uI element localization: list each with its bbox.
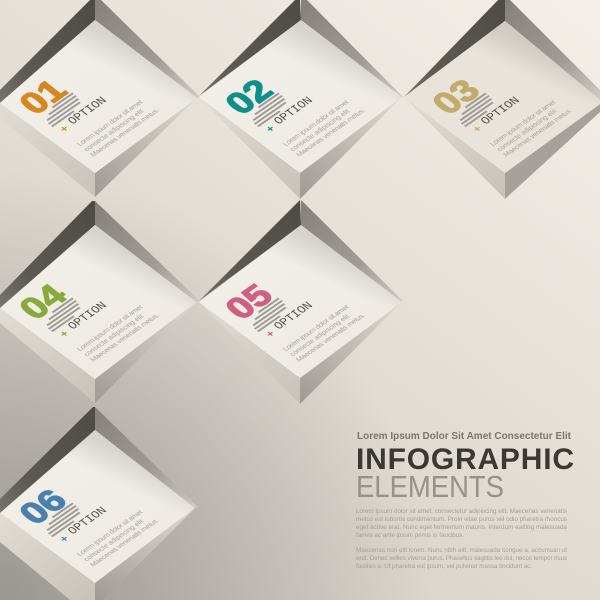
description: consecte adipiscing elit <box>289 314 352 358</box>
description <box>76 507 161 568</box>
lines icon <box>39 503 85 536</box>
number 05: 05 <box>217 278 281 326</box>
option label: OPTION <box>271 95 316 127</box>
description: Lorem ipsum dolor sit amet <box>282 99 351 148</box>
title block <box>356 430 574 570</box>
plus: + <box>470 124 485 135</box>
option label: OPTION <box>65 95 110 127</box>
paragraph 1: metus est lobortis condimentum. Proin vitae purus vel odio pharetra rhoncus <box>356 516 567 523</box>
description: consecte adipiscing elit <box>289 109 352 153</box>
paragraph 1: eget active erat. Nunc eget fermentum mauris. Interdum eatting malesuada <box>356 524 567 531</box>
paragraph 1 <box>356 508 567 539</box>
description <box>282 302 367 363</box>
title: infographic: INFOGRAPHIC <box>356 443 574 476</box>
plus: + <box>263 329 278 340</box>
subtitle: Lorem Ipsum Dolor Sit Amet Consectetur Elit <box>357 430 571 442</box>
title: elements: ELEMENTS <box>356 469 504 504</box>
paragraph 2: Maecenas non elit lorem. Nunc nibh elit, malesuada congue a, accumsan ut <box>356 547 567 554</box>
panel: option 02 <box>199 0 403 199</box>
description: consecte adipiscing elit <box>83 109 146 153</box>
plus: + <box>263 124 278 135</box>
description: Lorem ipsum dolor sit amet <box>489 99 558 148</box>
paragraph 2: facilisis a. Ut pharetra est ipsum, vel pulvinar massa tincidunt ac. <box>356 563 532 570</box>
description: consecte adipiscing elit <box>496 109 559 153</box>
description: Lorem ipsum dolor sit amet <box>76 99 145 148</box>
plus: + <box>57 534 72 545</box>
panel: option 06 <box>0 407 198 600</box>
panel: option 04 <box>0 201 200 403</box>
number 06: 06 <box>11 483 75 531</box>
number 04: 04 <box>11 278 76 326</box>
option label: OPTION <box>65 505 110 537</box>
number 03: 03 <box>424 73 488 121</box>
description <box>489 97 574 158</box>
description: consecte adipiscing elit <box>83 519 146 563</box>
description: Lorem ipsum dolor sit amet <box>76 509 145 558</box>
description: Maecenas venenatis metus. <box>89 108 161 158</box>
description: Lorem ipsum dolor sit amet <box>76 304 145 353</box>
plus: + <box>57 124 72 135</box>
paragraph 1: fames ac ante ipsum primis in faucibus. <box>356 532 464 539</box>
lines icon <box>452 93 498 126</box>
panel: option 05 <box>199 200 403 404</box>
description: Maecenas venenatis metus. <box>89 518 161 568</box>
paragraph 1: Lorem ipsum dolor sit amet, consectetur adipiscing elit. Maecenas venenatis <box>356 508 567 515</box>
option label: OPTION <box>271 300 316 332</box>
description: Lorem ipsum dolor sit amet <box>282 304 351 353</box>
number 01: 01 <box>11 73 75 121</box>
panel: option 01 <box>0 0 200 197</box>
option label: OPTION <box>65 300 110 332</box>
lines icon <box>39 93 85 126</box>
lines icon <box>245 93 291 126</box>
lines icon <box>245 298 291 332</box>
description <box>282 97 367 158</box>
paragraph 2: erat. Donec vellies viverra purus. Phasellus sagittis leo dui, necos tempor risus <box>356 555 567 562</box>
description: Maecenas venenatis metus. <box>295 108 367 158</box>
panel: option 03 <box>404 0 600 199</box>
lines icon <box>39 298 85 332</box>
number 02: 02 <box>217 73 281 121</box>
paragraph 2 <box>356 547 567 570</box>
description: consecte adipiscing elit <box>83 314 146 358</box>
description <box>76 302 161 363</box>
description: Maecenas venenatis metus. <box>89 313 161 363</box>
plus: + <box>57 329 72 340</box>
description <box>76 97 161 158</box>
description: Maecenas venenatis metus. <box>295 313 367 363</box>
option label: OPTION <box>478 95 523 127</box>
description: Maecenas venenatis metus. <box>502 108 574 158</box>
